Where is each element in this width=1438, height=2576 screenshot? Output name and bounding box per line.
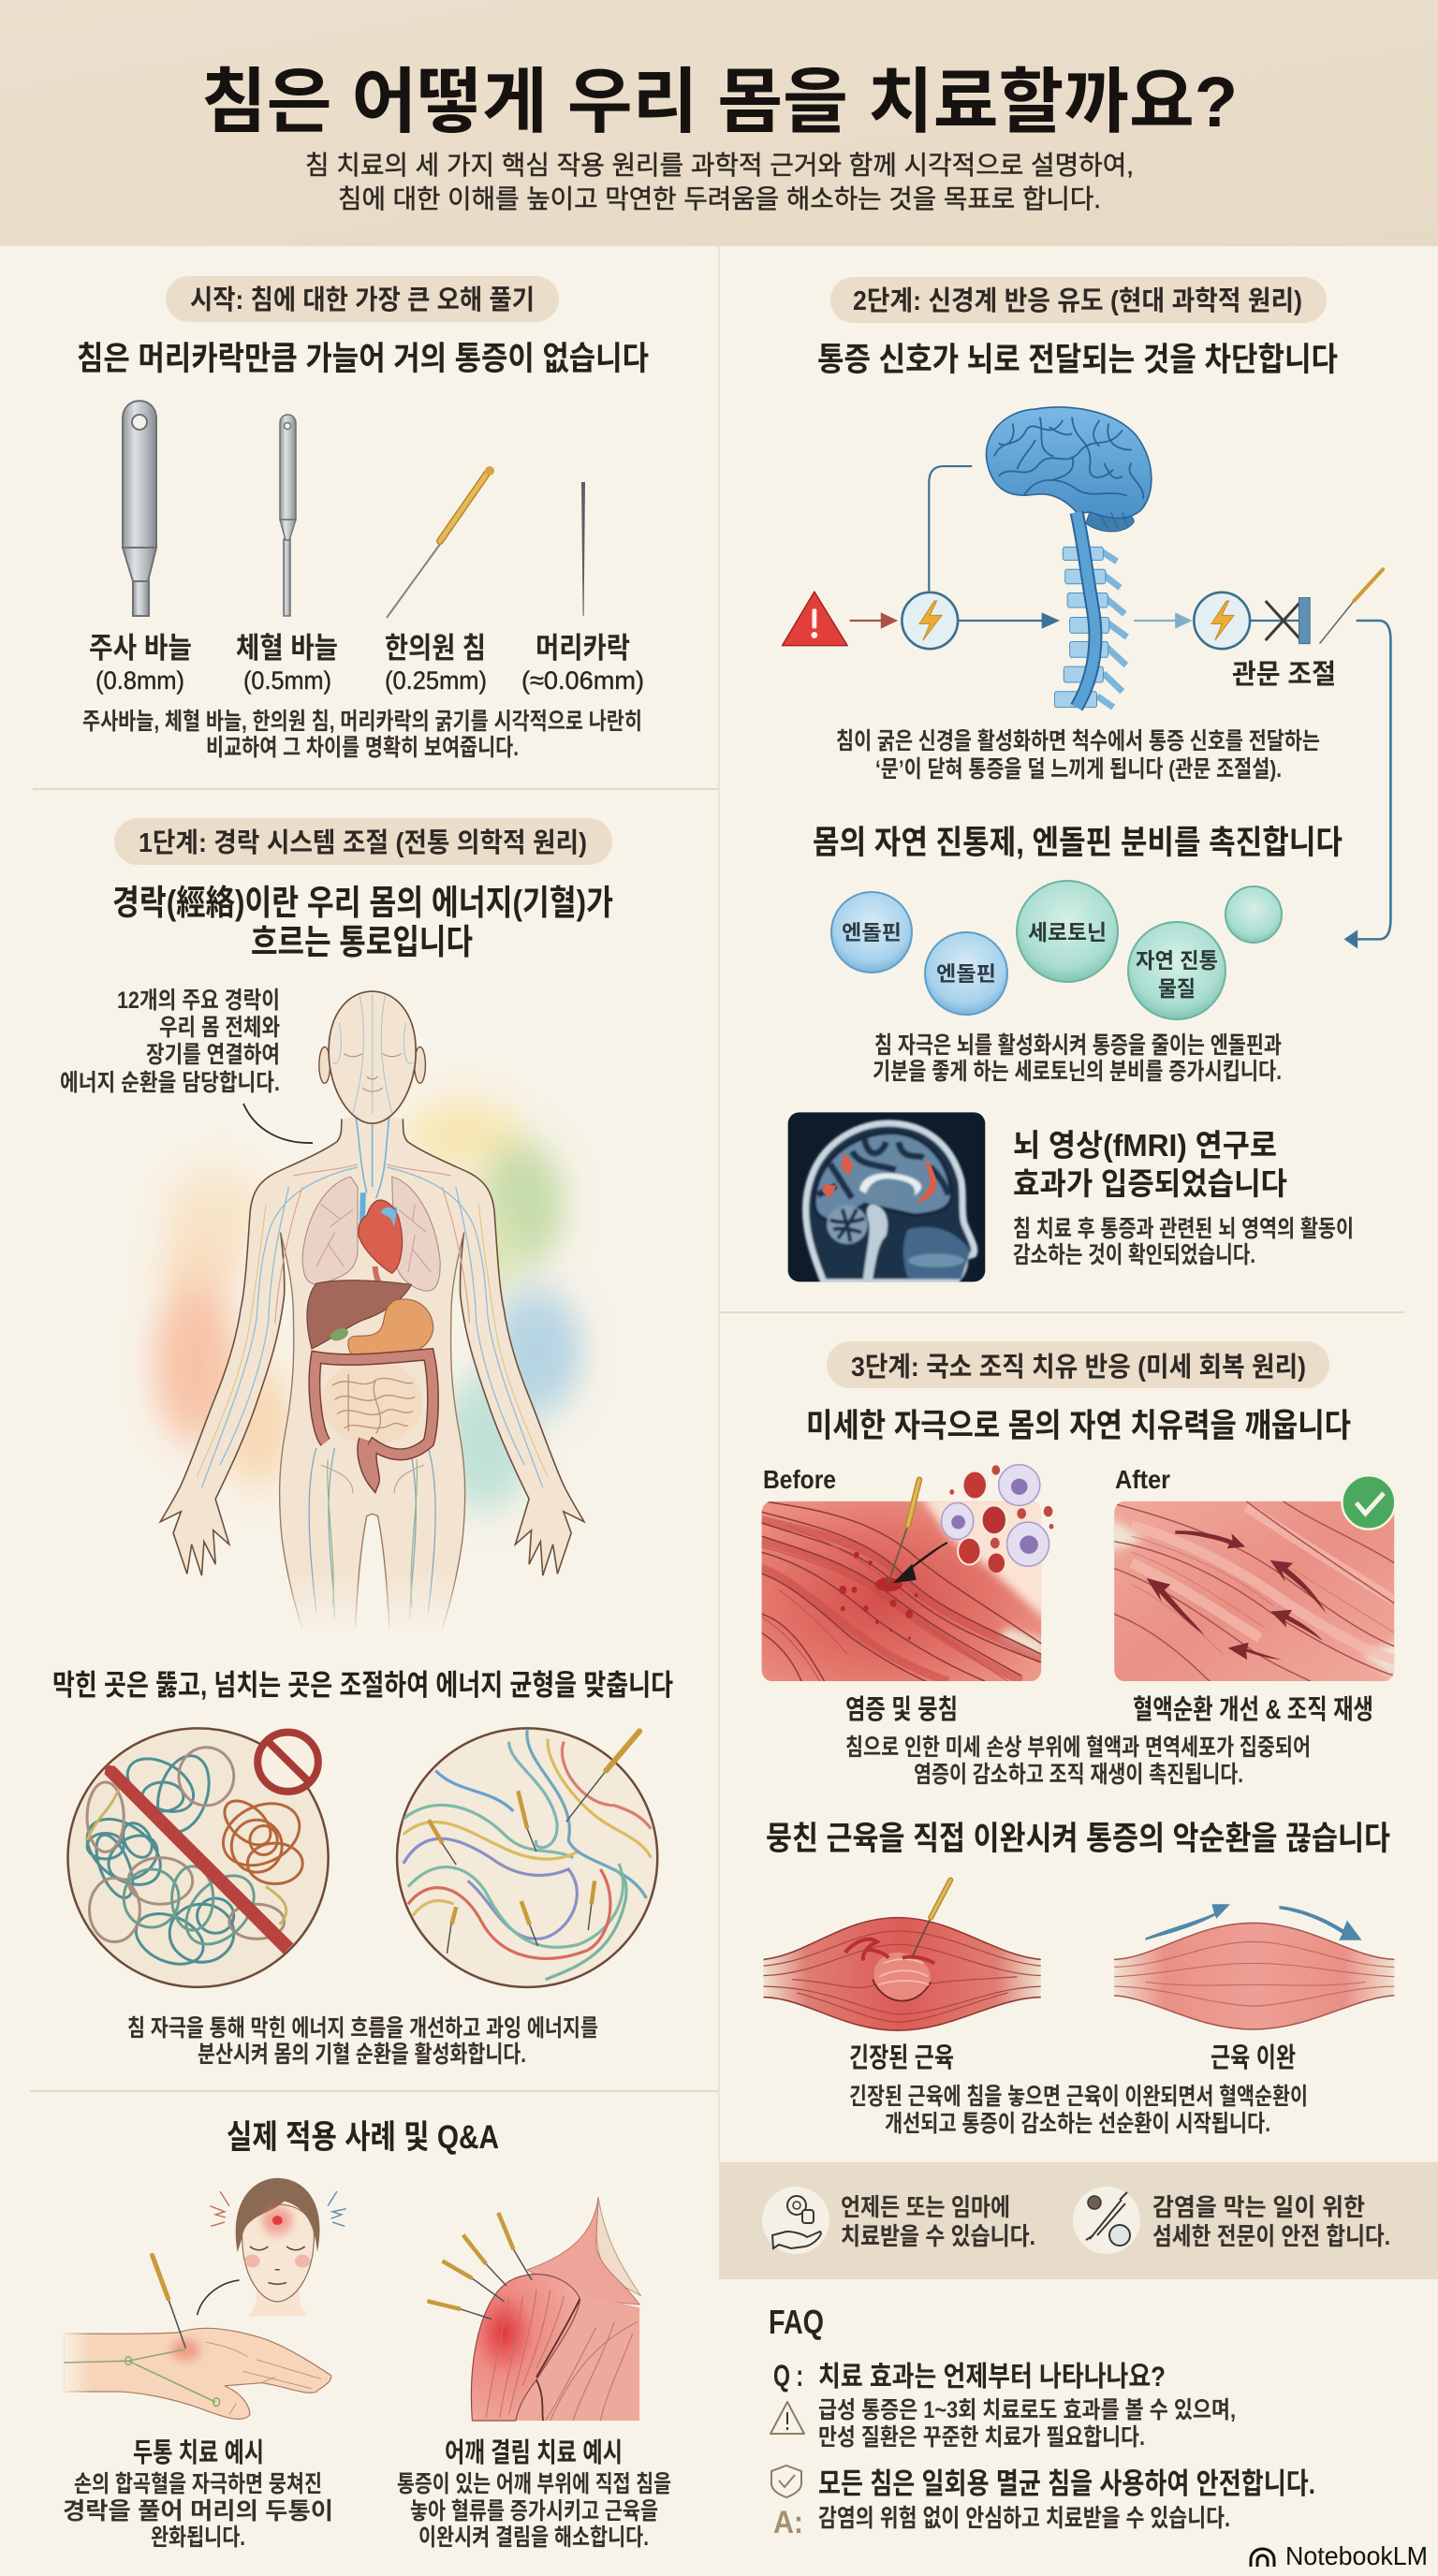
illustration: inflamed muscle before <box>762 1465 1053 1681</box>
bubble: natural pain relievers: 물질 <box>1158 976 1196 1001</box>
answer text: 급성 통증은 1~3회 치료로도 효과를 볼 수 있으며, <box>818 2397 1236 2423</box>
muscle creases <box>536 2299 580 2421</box>
fMRI text: 감소하는 것이 확인되었습니다. <box>1013 1242 1255 1268</box>
brain stem <box>863 1205 888 1282</box>
callout: 12 meridians: 에너지 순환을 담당합니다. <box>60 1070 280 1096</box>
face tissue <box>903 1227 971 1280</box>
section pill <box>114 818 612 865</box>
fMRI brain scan image <box>788 1112 985 1282</box>
subtitle <box>305 151 1134 213</box>
safety text 1: 치료받을 수 있습니다. <box>841 2222 1035 2250</box>
callout: 12 meridians: 12개의 주요 경락이 <box>117 988 280 1014</box>
description text: 침으로 인한 미세 손상 부위에 혈액과 면역세포가 집중되어 <box>845 1734 1311 1761</box>
panel: step 2 nervous system <box>783 277 1390 1282</box>
panel: safety band <box>719 2162 1438 2279</box>
NotebookLM logo: NotebookLM <box>1285 2541 1428 2570</box>
main title: 침은 어떻게 우리 몸을 치료할까요? <box>201 63 1238 142</box>
illustration: human body with meridians <box>154 991 584 1635</box>
case text: shoulder: 통증이 있는 어깨 부위에 직접 침을 <box>397 2471 671 2497</box>
circulation arrows <box>1146 1530 1327 1660</box>
subtitle: 침 치료의 세 가지 핵심 작용 원리를 과학적 근거와 함께 시각적으로 설명하여, <box>305 151 1134 180</box>
needle label: acupuncture: (0.25mm) <box>385 666 487 695</box>
heading: 경락(經絡)이란 우리 몸의 에너지(기혈)가 <box>112 884 613 922</box>
heading: endorphin: 몸의 자연 진통제, 엔돌핀 분비를 촉진합니다 <box>813 825 1343 861</box>
heart <box>359 1193 403 1273</box>
balance heading: 막힌 곳은 뚫고, 넘치는 곳은 조절하여 에너지 균형을 맞춥니다 <box>52 1669 673 1702</box>
esophagus <box>375 1266 388 1300</box>
label: after: After <box>1115 1465 1170 1494</box>
skull outline <box>805 1123 975 1282</box>
icon: hair <box>581 482 585 616</box>
connector arc <box>198 2280 240 2315</box>
watercolor background <box>154 1102 582 1511</box>
pelvis <box>321 1465 424 1493</box>
answer text: 만성 질환은 꾸준한 치료가 필요합니다. <box>818 2424 1145 2451</box>
bubble: serotonin <box>1017 881 1118 982</box>
bubble: endorphin 1 <box>831 892 912 973</box>
signal node 1 <box>902 593 958 649</box>
case text: shoulder <box>397 2437 671 2551</box>
chest muscle <box>472 2276 639 2421</box>
gate label: 관문 조절 <box>1232 659 1336 690</box>
description text: 주사바늘, 체혈 바늘, 한의원 침, 머리카락의 굵기를 시각적으로 나란히 <box>82 709 642 735</box>
pain marks <box>210 2191 229 2226</box>
arrow: to spine <box>959 614 1057 627</box>
needle label: syringe <box>89 632 192 695</box>
bubble: endorphin 2: 엔돌핀 <box>936 962 996 986</box>
description text: 염증이 감소하고 조직 재생이 촉진됩니다. <box>914 1762 1243 1788</box>
section pill: 3단계: 국소 조직 치유 반응 (미세 회복 원리) <box>851 1352 1306 1383</box>
arrow: faded signal <box>1134 614 1190 627</box>
face <box>236 2178 320 2316</box>
needle label: lancet: 체혈 바늘 <box>236 632 338 665</box>
description text: 분산시켜 몸의 기혈 순환을 활성화합니다. <box>198 2042 526 2068</box>
leg fade <box>275 1573 472 1635</box>
panel: start misconception <box>77 276 649 761</box>
icon: warning triangle <box>783 592 847 646</box>
heading: 흐르는 통로입니다 <box>251 923 473 961</box>
active region: parietal <box>841 1153 854 1177</box>
large intestine inner <box>315 1354 433 1482</box>
needle <box>913 1880 950 1956</box>
bubble: endorphin 2 <box>925 932 1007 1015</box>
fibers <box>486 2290 638 2421</box>
illustration: shoulder treatment <box>427 2197 641 2421</box>
bubble: natural pain relievers <box>1128 922 1225 1019</box>
stomach <box>348 1299 433 1364</box>
answer text <box>818 2397 1236 2451</box>
icon: hand holding <box>762 2187 829 2254</box>
needles <box>427 2213 532 2320</box>
section pill: 시작: 침에 대한 가장 큰 오해 풀기 <box>190 285 535 315</box>
case text: shoulder: 이완시켜 결림을 해소합니다. <box>418 2525 649 2551</box>
label: before: Before <box>763 1465 836 1494</box>
small intestine <box>322 1360 423 1445</box>
caption: relaxed muscle: 근육 이완 <box>1211 2042 1296 2073</box>
heading: 통증 신호가 뇌로 전달되는 것을 차단합니다 <box>817 342 1338 378</box>
description text: 침이 굵은 신경을 활성화하면 척수에서 통증 신호를 전달하는 <box>836 728 1320 754</box>
panel: FAQ <box>769 2303 1315 2540</box>
icon: acupuncture needle <box>387 466 494 618</box>
red strike bar <box>105 1764 293 1954</box>
caption: regeneration: 혈액순환 개선 & 조직 재생 <box>1133 1694 1373 1725</box>
mirrored body half <box>373 1113 584 1630</box>
section pill: 2단계: 신경계 반응 유도 (현대 과학적 원리) <box>853 285 1302 316</box>
question: Q : <box>773 2359 803 2393</box>
needle label: hair <box>521 632 644 695</box>
illustration: tense muscle <box>764 1880 1041 2030</box>
upper trapezius <box>527 2197 639 2305</box>
arrow: cells to injury <box>896 1543 947 1582</box>
needle label: syringe: 주사 바늘 <box>89 632 192 665</box>
brain <box>986 407 1152 532</box>
case text: shoulder: 어깨 결림 치료 예시 <box>445 2437 623 2468</box>
deltoid muscle <box>471 2274 580 2421</box>
callout: 12 meridians: 우리 몸 전체와 <box>159 1015 280 1041</box>
callout: 12 meridians <box>60 988 313 1143</box>
panel: step 1 meridian system <box>52 818 673 2068</box>
head <box>319 991 425 1123</box>
case text: headache: 손의 합곡혈을 자극하면 뭉쳐진 <box>74 2471 322 2497</box>
safety text 2: 섬세한 전문이 안전 합니다. <box>1152 2222 1390 2250</box>
safety text 1: 언제든 또는 임마에 <box>841 2193 1010 2221</box>
active region: frontal <box>916 1159 936 1203</box>
hand <box>60 2328 331 2419</box>
description text: 비교하여 그 차이를 명확히 보여줍니다. <box>206 735 519 761</box>
blocked gate <box>1251 597 1310 644</box>
heading: 미세한 자극으로 몸의 자연 치유력을 깨웁니다 <box>806 1408 1351 1444</box>
description text: 침 자극을 통해 막힌 에너지 흐름을 개선하고 과잉 에너지를 <box>127 2015 598 2042</box>
diagram: gate control <box>783 407 1390 948</box>
needle label: hair: 머리카락 <box>536 632 630 665</box>
icon: green check badge <box>1343 1475 1395 1530</box>
section pill: 1단계: 경락 시스템 조절 (전통 의학적 원리) <box>139 827 587 858</box>
icon: shield <box>771 2466 801 2497</box>
description text: 긴장된 근육에 침을 놓으면 근육이 이완되면서 혈액순환이 <box>849 2084 1308 2110</box>
neck skin <box>596 2197 641 2296</box>
safety text 1 <box>841 2193 1035 2250</box>
header banner <box>0 0 1438 246</box>
lungs <box>302 1177 440 1291</box>
body silhouette <box>160 1113 373 1630</box>
description text: 기분을 좋게 하는 세로토닌의 분비를 증가시킵니다. <box>873 1059 1282 1085</box>
corpus callosum <box>859 1173 921 1195</box>
panel: step 3 local tissue healing <box>762 1341 1400 2137</box>
large needle <box>566 1731 639 1822</box>
balanced energy circle <box>397 1728 657 1987</box>
icon: prohibition sign <box>257 1733 318 1792</box>
safety statement: 모든 침은 일회용 멸균 침을 사용하여 안전합니다. <box>818 2467 1315 2500</box>
relax arrow right <box>1279 1906 1362 1940</box>
icon: syringe needle <box>123 401 156 616</box>
pain marks right <box>328 2191 346 2226</box>
caption: tense muscle: 긴장된 근육 <box>849 2042 954 2073</box>
needle label: acupuncture: 한의원 침 <box>385 632 486 665</box>
liver <box>307 1281 411 1349</box>
small needles <box>429 1791 594 1954</box>
bubble: serotonin: 세로토닌 <box>1028 920 1107 944</box>
icon: lancet needle <box>280 415 296 616</box>
FAQ heading: FAQ <box>769 2303 824 2341</box>
description text <box>849 2084 1308 2137</box>
arrow: to endorphin bubbles <box>1344 621 1390 948</box>
safety text 2: 감염을 막는 일이 위한 <box>1152 2193 1365 2221</box>
signal node 2 <box>1194 593 1250 649</box>
caption: inflammation: 염증 및 뭉침 <box>845 1694 958 1725</box>
needle label: lancet: (0.5mm) <box>243 666 331 695</box>
needle <box>1320 569 1383 644</box>
description text: 침 자극은 뇌를 활성화시켜 통증을 줄이는 엔돌핀과 <box>874 1032 1282 1059</box>
question: 치료 효과는 언제부터 나타나나요? <box>818 2362 1166 2393</box>
case text: headache: 완화됩니다. <box>151 2525 245 2551</box>
illustration: healed muscle after <box>1108 1475 1400 1681</box>
needle label: acupuncture <box>385 632 487 695</box>
subtitle: 침에 대한 이해를 높이고 막연한 두려움을 해소하는 것을 목표로 합니다. <box>338 184 1101 213</box>
bubbles <box>831 881 1282 1019</box>
fMRI text: 뇌 영상(fMRI) 연구로 <box>1013 1128 1277 1163</box>
heading <box>112 884 613 961</box>
description text: 개선되고 통증이 감소하는 선순환이 시작됩니다. <box>885 2111 1270 2137</box>
section pill <box>827 1341 1329 1388</box>
relax arrow left <box>1145 1904 1230 1940</box>
safety text 2 <box>1152 2193 1390 2250</box>
answer <box>773 2504 1230 2540</box>
panel: case examples and Q&A <box>60 2119 671 2551</box>
brain tissue <box>814 1133 952 1222</box>
fMRI text <box>1013 1128 1354 1268</box>
active region: occipital <box>822 1184 836 1198</box>
answer: A: <box>773 2505 803 2540</box>
description text <box>836 728 1320 783</box>
callout: 12 meridians: 장기를 연결하여 <box>146 1042 280 1068</box>
fMRI text: 침 치료 후 통증과 관련된 뇌 영역의 활동이 <box>1013 1216 1354 1242</box>
description text <box>82 709 642 761</box>
needle label: lancet <box>236 632 338 695</box>
description text <box>873 1032 1282 1085</box>
description text: ‘문’이 닫혀 통증을 덜 느끼게 됩니다 (관문 조절설). <box>875 756 1282 783</box>
description text <box>845 1734 1311 1788</box>
blocked energy circle <box>67 1728 329 1987</box>
fMRI text: 효과가 입증되었습니다 <box>1013 1166 1287 1201</box>
illustration: relaxed muscle <box>1114 1904 1394 2029</box>
bubble: endorphin 1: 엔돌핀 <box>842 921 902 944</box>
spinal cord <box>1054 512 1127 708</box>
neck meridians <box>356 1113 389 1198</box>
needle <box>888 1480 919 1585</box>
arrow: pain signal in <box>850 614 896 627</box>
heading: 실제 적용 사례 및 Q&A <box>227 2119 499 2156</box>
case text: headache <box>63 2437 333 2551</box>
bubble: natural pain relievers: 자연 진통 <box>1136 948 1218 973</box>
gallbladder <box>330 1326 349 1343</box>
bubble: empty <box>1225 886 1282 943</box>
cerebellum <box>827 1206 868 1244</box>
immune cell cluster <box>942 1465 1053 1573</box>
illustration: headache treatment <box>60 2178 346 2419</box>
diagram: blocked and balanced circles <box>67 1728 657 1987</box>
description text <box>127 2015 598 2068</box>
case text: headache: 두통 치료 예시 <box>133 2437 264 2468</box>
section pill <box>830 277 1327 323</box>
answer: 감염의 위험 없이 안심하고 치료받을 수 있습니다. <box>818 2504 1230 2532</box>
case text: headache: 경락을 풀어 머리의 두통이 <box>63 2498 333 2525</box>
section pill <box>166 276 559 322</box>
icon: syringe and pill <box>1073 2187 1140 2254</box>
connector to brain <box>929 466 972 591</box>
needle <box>153 2255 185 2348</box>
large intestine <box>315 1354 433 1482</box>
heading: 침은 머리카락만큼 가늘어 거의 통증이 없습니다 <box>77 341 649 377</box>
needle label: syringe: (0.8mm) <box>95 666 184 695</box>
icon: caution <box>770 2402 804 2434</box>
needle label: hair: (≈0.06mm) <box>521 666 644 695</box>
case text: shoulder: 놓아 혈류를 증가시키고 근육을 <box>410 2498 658 2525</box>
